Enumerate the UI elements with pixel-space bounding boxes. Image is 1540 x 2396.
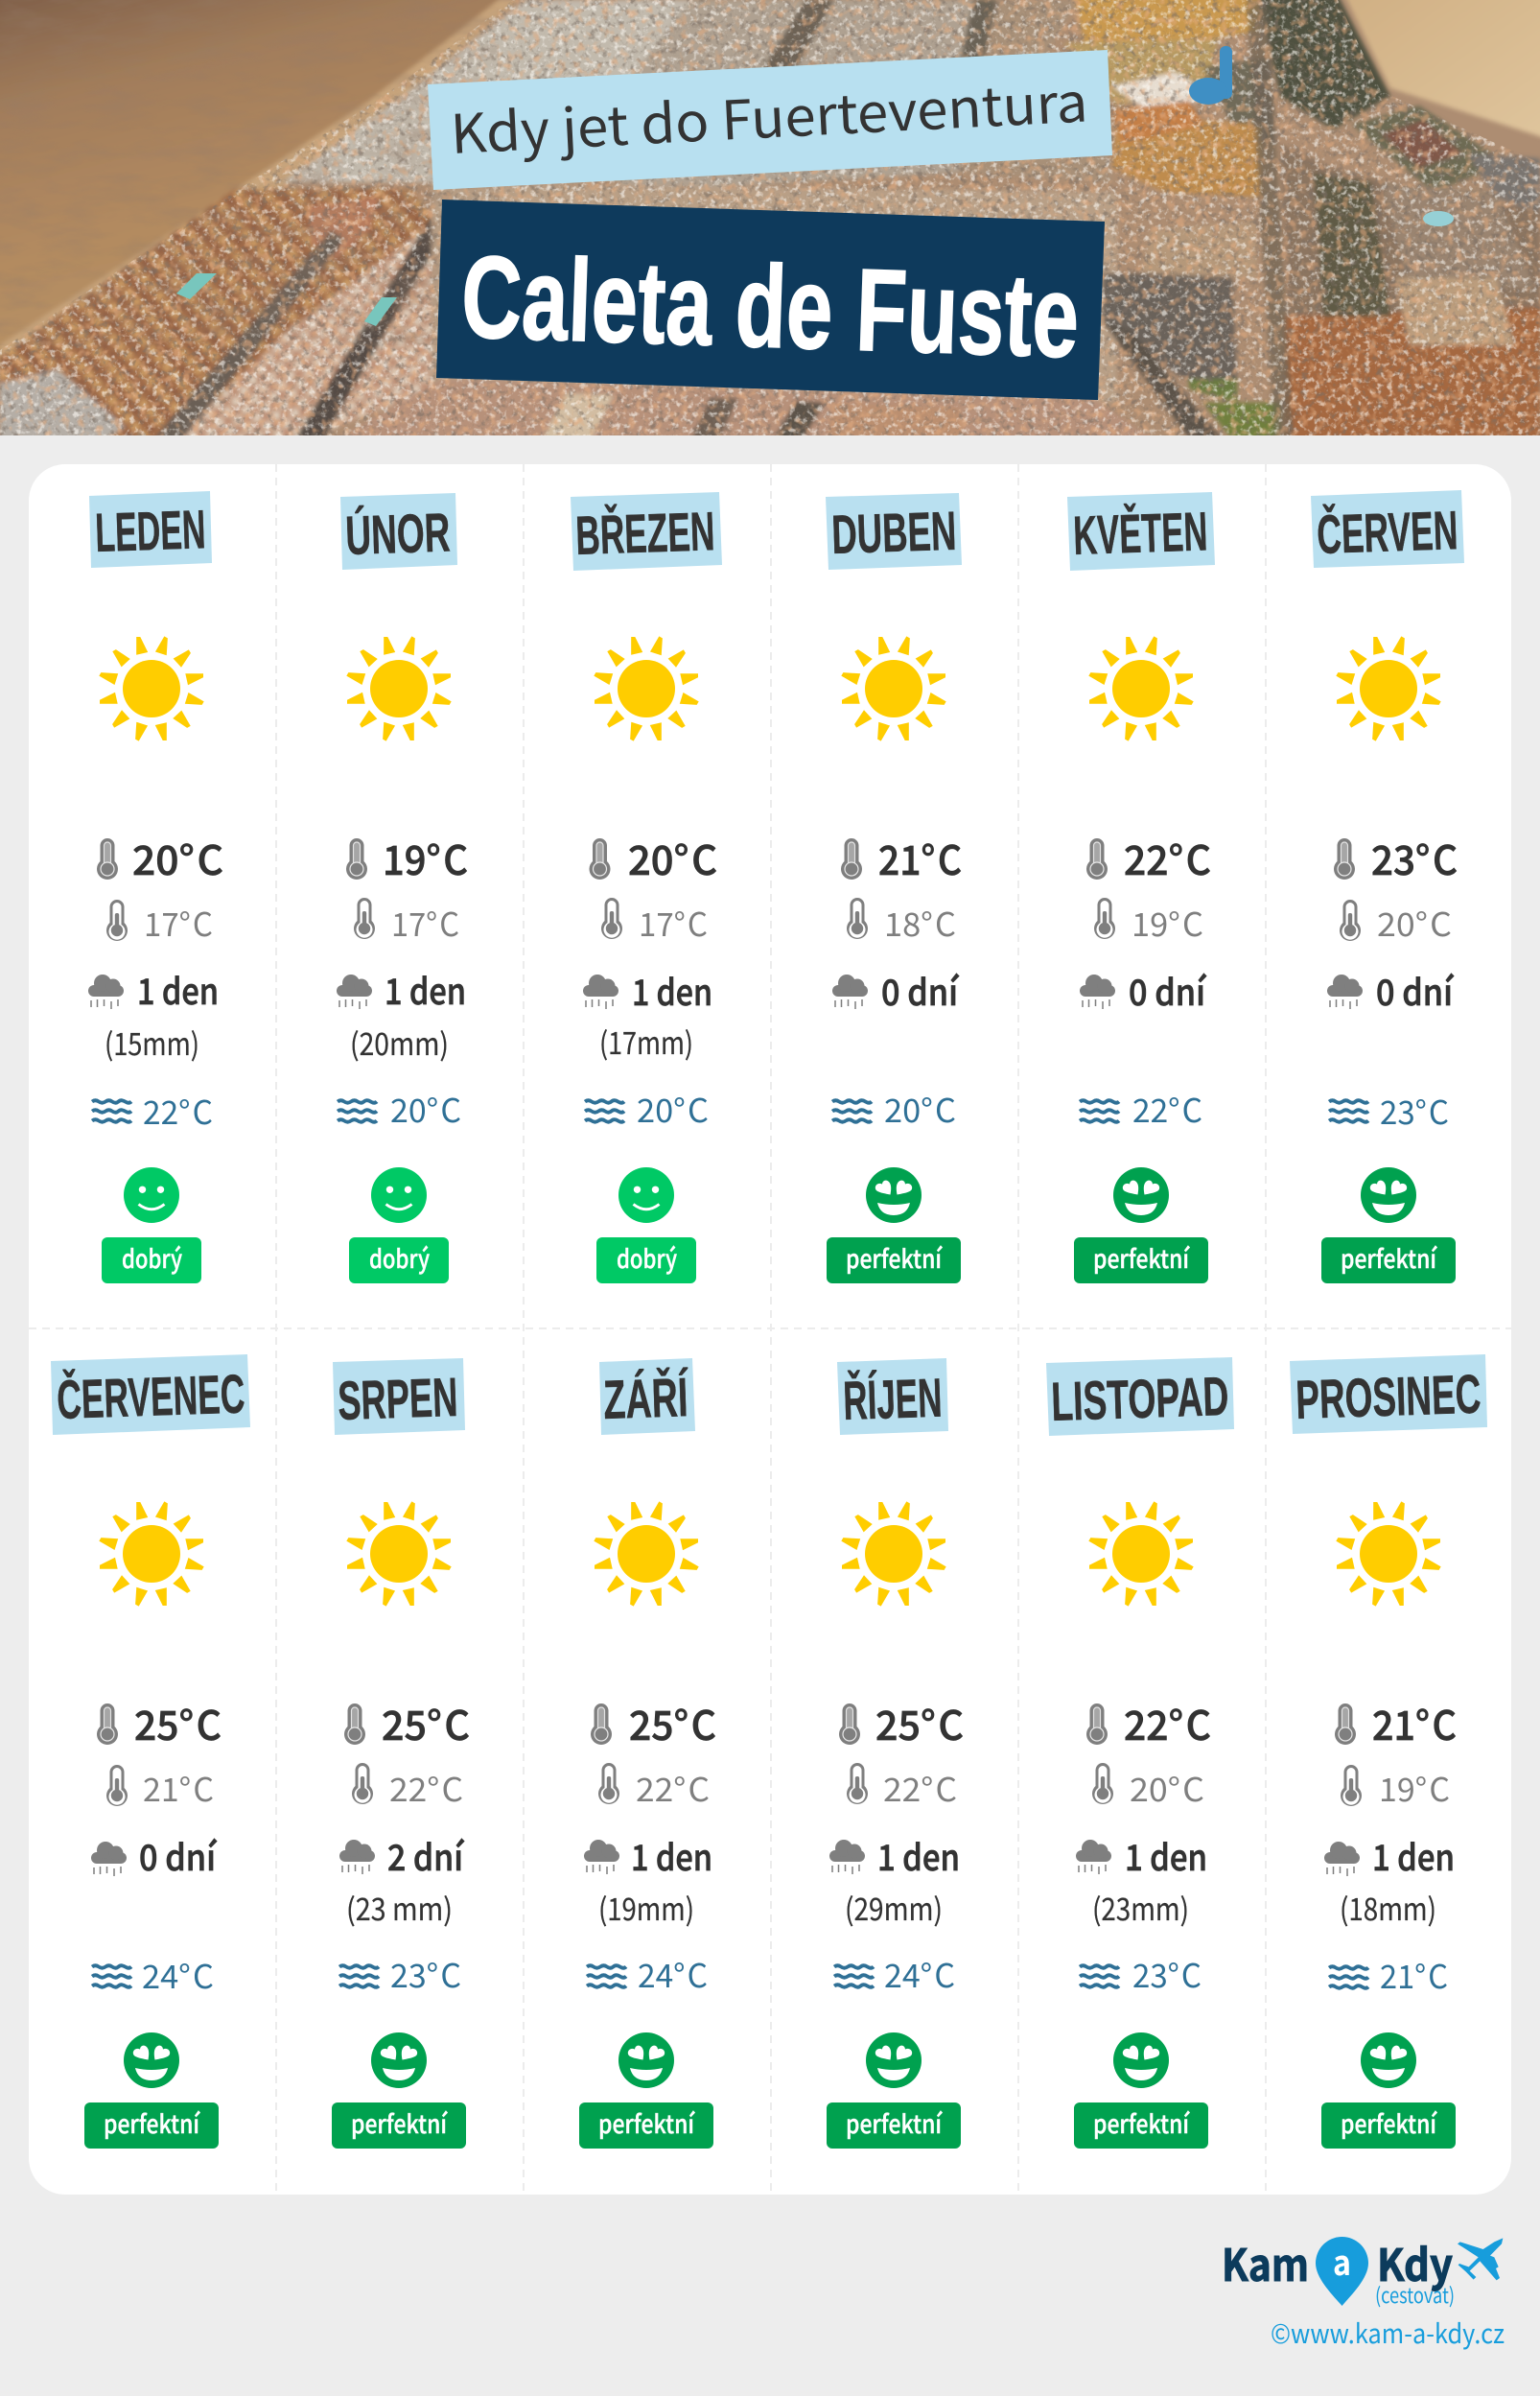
- logo: Kam a Kdy: Kam: [1222, 2231, 1309, 2294]
- sea temperature: 23° C: [1132, 1950, 1202, 1997]
- sea temperature: 22° C: [1132, 1085, 1202, 1132]
- max temperature: [841, 829, 962, 887]
- pools: [1220, 46, 1232, 99]
- month: únor: [337, 493, 468, 1283]
- label: LISTOPAD: [1046, 1357, 1234, 1436]
- max temperature: 20° C: [132, 829, 223, 887]
- rainfall: (15mm): [105, 1021, 199, 1065]
- label: ZÁŘÍ: [599, 1358, 695, 1435]
- month: prosinec: [1290, 1354, 1487, 2149]
- min temperature: 22° C: [883, 1764, 957, 1811]
- icon: plane: [1458, 2238, 1503, 2280]
- max temperature: [97, 1694, 222, 1752]
- max temperature: 22° C: [1124, 1694, 1211, 1752]
- white table panel: [29, 464, 1511, 2195]
- rain days: 1 den: [631, 1829, 712, 1881]
- month: duben: [826, 493, 962, 1283]
- min temperature: [352, 1763, 463, 1811]
- rating: dobrý: dobrý: [122, 1240, 182, 1276]
- month: květen: [1067, 492, 1215, 1283]
- min temperature: 17° C: [639, 899, 708, 946]
- rainfall: (29mm): [845, 1886, 943, 1930]
- rain days: 2 dní: [387, 1829, 464, 1881]
- rating: perfektní: perfektní: [1341, 2105, 1437, 2141]
- rating: perfektní: perfektní: [846, 1240, 943, 1276]
- rain days: 1 den: [632, 964, 712, 1016]
- sea temperature: 22° C: [143, 1087, 213, 1134]
- icon: sun: [99, 636, 204, 741]
- logo: Kam a Kdy: [1222, 2231, 1503, 2310]
- label: ČERVEN: [1311, 490, 1464, 568]
- icon: sun: [1336, 636, 1441, 741]
- lower centre: [348, 380, 1143, 435]
- rating: perfektní: [827, 1167, 961, 1283]
- rain days: [829, 1829, 960, 1881]
- month: září: [579, 1358, 716, 2149]
- icon: sun: [841, 1501, 946, 1607]
- icon: sun: [1336, 1501, 1441, 1607]
- rating: dobrý: [102, 1167, 201, 1283]
- rain days: 1 den: [1372, 1829, 1455, 1881]
- icon: sun: [594, 636, 699, 741]
- rating: perfektní: perfektní: [1093, 1240, 1190, 1276]
- sea temperature: 20° C: [884, 1085, 956, 1132]
- label: LISTOPAD: LISTOPAD: [1050, 1366, 1229, 1433]
- long pink complex: [182, 232, 434, 435]
- min temperature: 20° C: [1130, 1764, 1204, 1811]
- max temperature: [1086, 1694, 1211, 1752]
- rain days: 0 dní: [1376, 964, 1454, 1016]
- min temperature: 20° C: [1377, 899, 1452, 946]
- icon: sun: [99, 1501, 204, 1607]
- centre under titles: [432, 182, 1117, 403]
- rating: perfektní: [1321, 1167, 1456, 1283]
- max temperature: [1086, 829, 1211, 887]
- rain days: [583, 964, 712, 1016]
- icon: sun: [346, 1501, 452, 1607]
- icon: sun: [841, 636, 946, 741]
- beach road: [0, 0, 518, 360]
- label: ÚNOR: ÚNOR: [344, 502, 451, 567]
- rating: perfektní: [1074, 2032, 1208, 2149]
- rating: dobrý: [596, 1167, 696, 1283]
- max temperature: 23° C: [1371, 829, 1458, 887]
- min temperature: 19° C: [1379, 1764, 1450, 1811]
- rain days: [88, 963, 219, 1015]
- min temperature: 17° C: [144, 899, 213, 946]
- rating: perfektní: perfektní: [846, 2105, 943, 2141]
- sea temperature: [92, 1087, 213, 1134]
- sea temperature: 23° C: [1380, 1087, 1449, 1134]
- max temperature: [839, 1694, 964, 1752]
- max temperature: [591, 1694, 716, 1752]
- rain days: [1076, 1829, 1207, 1881]
- rating: perfektní: perfektní: [104, 2105, 200, 2141]
- min temperature: [601, 898, 708, 946]
- min temperature: 17° C: [391, 899, 459, 946]
- sea temperature: 24° C: [142, 1951, 214, 1998]
- max temperature: 20° C: [628, 829, 717, 887]
- sea temperature: [832, 1085, 956, 1132]
- rating: perfektní: [332, 2032, 466, 2149]
- min temperature: [847, 898, 956, 946]
- label: SRPEN: SRPEN: [337, 1367, 458, 1432]
- max temperature: [346, 829, 468, 887]
- photo: aerial view of Caleta de Fuste: [0, 0, 1540, 451]
- icon: sun: [1088, 1501, 1194, 1607]
- month: říjen: [827, 1358, 964, 2149]
- hotels top right: [982, 0, 1011, 56]
- courts: [1352, 106, 1505, 192]
- rating: dobrý: dobrý: [617, 1240, 677, 1276]
- logo: Kam a Kdy: (cestovat): [1375, 2279, 1455, 2310]
- logo: Kam a Kdy: a: [1333, 2236, 1351, 2286]
- sea temperature: [338, 1085, 461, 1132]
- rain days: [339, 1829, 464, 1881]
- month: březen: [571, 492, 722, 1283]
- rain days: [91, 1829, 217, 1881]
- rating: dobrý: dobrý: [369, 1240, 430, 1276]
- min temperature: 21° C: [143, 1764, 214, 1811]
- right town: [1280, 144, 1540, 326]
- rating: perfektní: [579, 2032, 713, 2149]
- rating: perfektní: perfektní: [1093, 2105, 1190, 2141]
- min temperature: [1341, 1764, 1450, 1811]
- label: ZÁŘÍ: ZÁŘÍ: [602, 1366, 690, 1431]
- label: ČERVENEC: [51, 1354, 250, 1435]
- icon: map pin: [1316, 2237, 1368, 2306]
- max temperature: 25° C: [629, 1694, 716, 1752]
- rain days: 0 dní: [881, 964, 959, 1016]
- website credit: ©www.kam-a-kdy.cz: [1271, 2314, 1505, 2352]
- rainfall: (19mm): [598, 1886, 694, 1930]
- label: ČERVENEC: ČERVENEC: [56, 1363, 245, 1431]
- label: DUBEN: [826, 493, 962, 570]
- min temperature: [847, 1763, 957, 1811]
- month: listopad: [1046, 1357, 1234, 2149]
- rating: perfektní: perfektní: [598, 2105, 695, 2141]
- logo: Kam a Kdy: Kdy: [1377, 2231, 1453, 2294]
- label: BŘEZEN: [571, 492, 722, 571]
- label: LEDEN: LEDEN: [94, 499, 206, 564]
- rain days: 0 dní: [139, 1829, 217, 1881]
- icon: sun: [1088, 636, 1194, 741]
- label: ÚNOR: [340, 493, 457, 570]
- sea temperature: 20° C: [637, 1085, 709, 1132]
- max temperature: 22° C: [1124, 829, 1211, 887]
- min temperature: 18° C: [884, 899, 956, 946]
- icon: sun: [346, 636, 452, 741]
- rain days: [1327, 964, 1454, 1016]
- rain days: [584, 1829, 712, 1881]
- max temperature: 19° C: [383, 829, 468, 887]
- max temperature: [1335, 1694, 1457, 1752]
- min temperature: [1340, 899, 1452, 946]
- min temperature: 19° C: [1132, 899, 1203, 946]
- min temperature: [354, 898, 459, 946]
- max temperature: [344, 1694, 470, 1752]
- rain days: 0 dní: [1129, 964, 1206, 1016]
- sea temperature: 24° C: [884, 1950, 955, 1997]
- rain days: [1080, 964, 1206, 1016]
- min temperature: [106, 1764, 214, 1811]
- rain days: 1 den: [1125, 1829, 1207, 1881]
- sea temperature: 20° C: [390, 1085, 461, 1132]
- max temperature: 25° C: [382, 1694, 470, 1752]
- min temperature: [1094, 898, 1203, 946]
- sea temperature: [1329, 1087, 1449, 1134]
- min temperature: [106, 899, 213, 946]
- sea temperature: [1329, 1951, 1448, 1998]
- rating: perfektní: [1321, 2032, 1456, 2149]
- min temperature: [1092, 1763, 1204, 1811]
- label: LEDEN: [89, 491, 212, 568]
- month: červen: [1311, 490, 1464, 1283]
- rainfall: (17mm): [599, 1020, 693, 1064]
- speckle texture: [0, 0, 1540, 435]
- rain days: 1 den: [137, 963, 219, 1015]
- sea temperature: [1080, 1085, 1202, 1132]
- label: ČERVEN: ČERVEN: [1316, 499, 1458, 566]
- month: červenec: [51, 1354, 250, 2149]
- min temperature: 22° C: [389, 1764, 463, 1811]
- max temperature: 21° C: [1372, 1694, 1457, 1752]
- sea temperature: 21° C: [1380, 1951, 1448, 1998]
- palm strip: [1258, 0, 1390, 129]
- rainfall: (18mm): [1340, 1886, 1436, 1930]
- sea temperature: [585, 1085, 709, 1132]
- label: DUBEN: DUBEN: [830, 501, 957, 566]
- rating: dobrý: [349, 1167, 449, 1283]
- lower left complex: [0, 189, 436, 451]
- rainfall: (20mm): [350, 1021, 449, 1065]
- rainfall: (23 mm): [346, 1886, 453, 1930]
- icon: sun: [594, 1501, 699, 1607]
- sea temperature: 24° C: [638, 1950, 708, 1997]
- rain days: [337, 963, 466, 1015]
- label: KVĚTEN: [1067, 492, 1215, 571]
- sea temperature: [587, 1950, 708, 1997]
- min temperature: [598, 1763, 710, 1811]
- max temperature: 25° C: [134, 1694, 222, 1752]
- max temperature: 25° C: [875, 1694, 964, 1752]
- max temperature: [589, 829, 717, 887]
- parking: [1103, 273, 1237, 379]
- label: ŘÍJEN: ŘÍJEN: [842, 1367, 943, 1432]
- rainfall: (23mm): [1092, 1886, 1189, 1930]
- label: KVĚTEN: KVĚTEN: [1072, 500, 1208, 567]
- sand: [0, 0, 518, 364]
- label: SRPEN: [333, 1358, 465, 1435]
- title band: Caleta de Fuste: Caleta de Fuste: [459, 231, 1081, 382]
- rain days: [832, 964, 959, 1016]
- rain days: 1 den: [385, 963, 466, 1015]
- rain days: [1324, 1829, 1455, 1881]
- sea temperature: [834, 1950, 955, 1997]
- max temperature: [1334, 829, 1458, 887]
- rain days: 1 den: [877, 1829, 960, 1881]
- month: leden: [88, 491, 223, 1283]
- min temperature: 22° C: [636, 1764, 710, 1811]
- villas along the road: [283, 0, 690, 182]
- month: srpen: [332, 1358, 470, 2149]
- sea temperature: 23° C: [390, 1950, 461, 1997]
- rating: perfektní: [84, 2032, 219, 2149]
- title band: Caleta de Fuste: [436, 200, 1105, 400]
- sea temperature: [1080, 1950, 1202, 1997]
- max temperature: 21° C: [878, 829, 962, 887]
- sea temperature: [92, 1951, 214, 1998]
- label: BŘEZEN: BŘEZEN: [574, 500, 715, 567]
- rating: perfektní: [1074, 1167, 1208, 1283]
- rating: perfektní: perfektní: [351, 2105, 448, 2141]
- sea temperature: [339, 1950, 461, 1997]
- title band: Kdy jet do Fuerteventura: Kdy jet do Fuerteventura: [449, 59, 1089, 170]
- rating: perfektní: [827, 2032, 961, 2149]
- label: ŘÍJEN: [837, 1358, 948, 1435]
- rating: perfektní: perfektní: [1341, 1240, 1437, 1276]
